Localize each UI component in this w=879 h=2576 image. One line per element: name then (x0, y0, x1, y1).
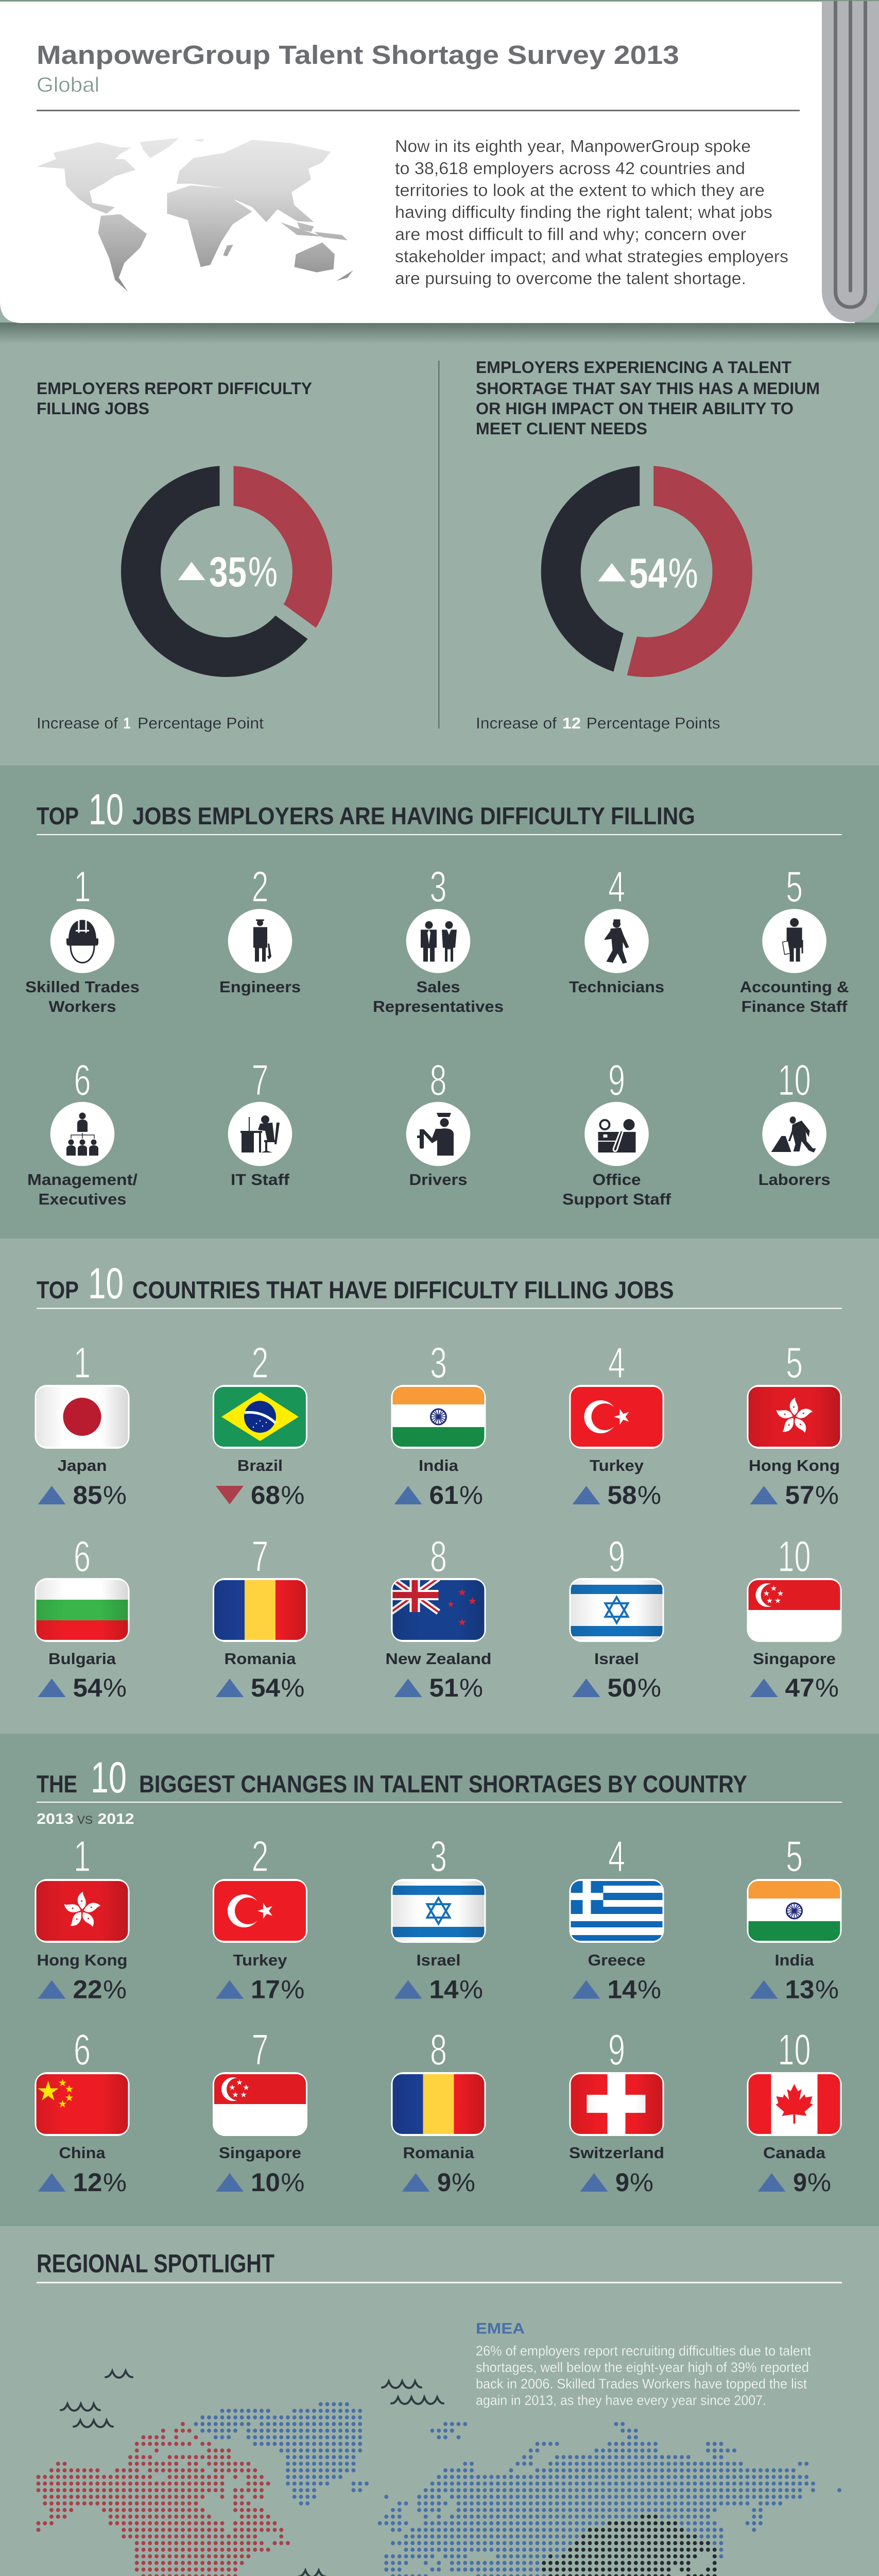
intro text block: are most difficult to fill and why; concern over (395, 225, 746, 244)
stat: 17% up (216, 1975, 305, 2004)
donut chart: 54% (561, 459, 732, 690)
job 1: skilled trades workers (25, 862, 140, 1015)
change 8: Romania: 8 (430, 2026, 447, 2074)
map region: Americas dots (38, 2424, 334, 2576)
country 4: Turkey: 4 (608, 1338, 625, 1387)
stat: 51% up: % (459, 1673, 483, 1702)
country 10: Singapore: Singapore (753, 1650, 836, 1668)
country 3: India: India (419, 1456, 459, 1475)
stat: 9% up: % (630, 2168, 653, 2197)
section band: top 10 jobs background (0, 766, 879, 1239)
change 10: Canada (747, 2026, 841, 2197)
flag: Japan (35, 1385, 130, 1449)
donut chart: 35% (141, 459, 322, 657)
flag: China (35, 2072, 130, 2136)
dotted world map (38, 2404, 839, 2576)
stat: 13% up: % (815, 1975, 839, 2004)
icon: hard hat (50, 909, 114, 973)
country 8: New Zealand: New Zealand (385, 1650, 491, 1668)
change 2: Turkey (213, 1832, 307, 2004)
job 10: laborers: 10 (778, 1056, 811, 1105)
stat: 50% up (573, 1673, 661, 1702)
stat: 9% up (580, 2168, 653, 2197)
change 7: Singapore: Singapore (219, 2144, 301, 2162)
heading: 10 (91, 1753, 127, 1802)
job 3: sales representatives: Representatives (373, 997, 504, 1015)
caption: increase of 12 percentage points: Increase of (476, 714, 557, 732)
job 10: laborers (759, 1056, 831, 1189)
change 6: China (35, 2026, 130, 2197)
heading: MEET CLIENT NEEDS (476, 419, 647, 438)
stat: 54% up (38, 1673, 127, 1702)
country 8: New Zealand (385, 1532, 491, 1702)
country 2: Brazil: 2 (251, 1338, 269, 1387)
stat: 14% up: % (637, 1975, 661, 2004)
intro text block (395, 137, 788, 287)
heading: BIGGEST CHANGES IN TALENT SHORTAGES BY COUNTRY (139, 1770, 747, 1798)
stat: 61% up (394, 1481, 483, 1510)
stat: 68% down: 68 (251, 1481, 280, 1510)
flag: Turkey (570, 1385, 664, 1449)
country 9: Israel: 9 (608, 1532, 625, 1581)
country 5: Hong Kong: 5 (786, 1338, 803, 1387)
heading (37, 1259, 674, 1308)
job 3: sales representatives: 3 (429, 862, 447, 911)
callout: EMEA: EMEA (476, 2320, 525, 2337)
country 1: Japan: Japan (58, 1456, 107, 1475)
job 6: management and executives: 6 (74, 1056, 91, 1105)
stat: 54% up: % (103, 1673, 127, 1702)
country 9: Israel (570, 1532, 664, 1702)
stat: 10% up: % (281, 2168, 305, 2197)
icon: office support (584, 1102, 649, 1166)
flag: Romania (391, 2072, 486, 2136)
stat: 14% up (573, 1975, 661, 2004)
job 1: skilled trades workers: Workers (48, 997, 116, 1015)
stat: 47% up: 47 (785, 1673, 815, 1702)
change 8: Romania (391, 2026, 486, 2197)
stat: 57% up (750, 1481, 839, 1510)
job 4: technicians (569, 862, 664, 996)
change 9: Switzerland (569, 2026, 664, 2197)
job 5: accounting and finance staff (740, 862, 849, 1015)
change 8: Romania: Romania (403, 2144, 474, 2162)
change 3: Israel: Israel (416, 1951, 460, 1969)
heading: TOP (37, 1276, 79, 1303)
country 5: Hong Kong: Hong Kong (749, 1456, 840, 1475)
change 9: Switzerland: 9 (608, 2026, 625, 2074)
subheading: 2013 vs 2012: 2013 (37, 1811, 74, 1827)
stat: 61% up: % (459, 1481, 483, 1510)
country 3: India (391, 1338, 486, 1510)
stat: 9% up: 9 (437, 2168, 451, 2197)
caption: increase of 1 percentage point: Percentage Point (137, 714, 264, 732)
stat: 57% up: % (815, 1481, 839, 1510)
country 4: Turkey (570, 1338, 664, 1510)
stat: 85% up: % (103, 1481, 127, 1510)
stat: 9% up: 9 (615, 2168, 629, 2197)
job 8: drivers: 8 (429, 1056, 447, 1105)
heading: EMPLOYERS EXPERIENCING A TALENT (476, 358, 791, 377)
stat: 54% up: 54 (251, 1673, 280, 1702)
change 7: Singapore (213, 2026, 307, 2197)
map region: Asia Pacific dots (544, 2517, 806, 2576)
job 7: IT staff: 7 (251, 1056, 269, 1105)
job 4: technicians: 4 (608, 862, 625, 911)
country 10: Singapore: 10 (778, 1532, 811, 1581)
heading: 10 (89, 785, 124, 834)
stat: 9% up (758, 2168, 831, 2197)
stat: 9% up: % (807, 2168, 831, 2197)
stat: 54% up: 54 (73, 1673, 102, 1702)
icon: accountant (762, 909, 826, 973)
change 5: India (747, 1832, 841, 2004)
panel: 10 biggest changes (35, 1753, 842, 2197)
title: ManpowerGroup Talent Shortage Survey 2013 (37, 40, 679, 70)
donut chart: 35%: 35 (209, 549, 247, 596)
stat: 10% up: 10 (251, 2168, 280, 2197)
job 1: skilled trades workers: Skilled Trades (25, 978, 140, 996)
icon: person at desk (228, 1102, 292, 1166)
change 4: Greece (570, 1832, 664, 2004)
stat: 58% up: % (637, 1481, 661, 1510)
donut chart: 54%: 54 (629, 550, 667, 597)
intro text block: territories to look at the extent to which they are (395, 180, 765, 200)
country 7: Romania: Romania (225, 1650, 296, 1668)
heading: 10 (88, 1259, 124, 1308)
job 5: accounting and finance staff: Finance Staff (742, 997, 848, 1015)
country 2: Brazil (213, 1338, 307, 1510)
donut chart: 35%: % (248, 549, 278, 596)
stat: 61% up: 61 (429, 1481, 458, 1510)
country 1: Japan: 1 (74, 1338, 91, 1387)
icon: engineer (228, 909, 292, 973)
job 10: laborers: Laborers (759, 1171, 831, 1189)
stat: 54% up (216, 1673, 305, 1702)
job 7: IT staff: IT Staff (231, 1171, 290, 1189)
subtitle: Global (37, 74, 99, 96)
panel: employers report difficulty (37, 379, 322, 732)
intro text block: stakeholder impact; and what strategies employers (395, 247, 788, 266)
job 4: technicians: Technicians (569, 978, 664, 996)
intro text block: to 38,618 employers across 42 countries and (395, 159, 745, 178)
job 9: office support staff: Office (592, 1171, 641, 1189)
panel: header notepad card (0, 0, 879, 344)
change 6: China: 6 (74, 2026, 91, 2074)
stat: 68% down: % (281, 1481, 305, 1510)
stat: 58% up (573, 1481, 661, 1510)
stat: 22% up (38, 1975, 127, 2004)
change 5: India: India (774, 1951, 814, 1969)
map region: EMEA dots (196, 2404, 839, 2576)
stat: 22% up: 22 (73, 1975, 102, 2004)
stat: 51% up (394, 1673, 483, 1702)
stat: 47% up (750, 1673, 839, 1702)
stat: 9% up: 9 (793, 2168, 807, 2197)
heading: COUNTRIES THAT HAVE DIFFICULTY FILLING JOBS (132, 1276, 674, 1303)
stat: 17% up: 17 (251, 1975, 280, 2004)
country 10: Singapore (747, 1532, 841, 1702)
icon: driver (406, 1102, 470, 1166)
subheading: 2013 vs 2012: 2012 (98, 1811, 134, 1827)
flag: Hong Kong (747, 1385, 841, 1449)
job 2: engineers (219, 862, 301, 996)
stat: 14% up: 14 (608, 1975, 637, 2004)
change 3: Israel: 3 (430, 1832, 447, 1880)
panel: regional spotlight (36, 2249, 842, 2576)
change 1: Hong Kong: 1 (74, 1832, 91, 1880)
job 2: engineers: 2 (251, 862, 269, 911)
heading: FILLING JOBS (37, 399, 149, 418)
flag: Israel (391, 1879, 486, 1943)
icon: org chart (50, 1102, 114, 1166)
caption: increase of 12 percentage points: Percentage Points (587, 714, 720, 732)
subheading: 2013 vs 2012: VS (77, 1814, 93, 1826)
heading: SHORTAGE THAT SAY THIS HAS A MEDIUM (476, 379, 820, 398)
flag: Hong Kong (35, 1879, 130, 1943)
intro text block: having difficulty finding the right talent; what jobs (395, 202, 772, 222)
icon: walking technician (584, 909, 649, 973)
intro text block: are pursuing to overcome the talent shortage. (395, 269, 746, 287)
stat: 14% up: % (459, 1975, 483, 2004)
job 3: sales representatives (373, 862, 504, 1015)
stat: 85% up: 85 (73, 1481, 102, 1510)
job 9: office support staff (562, 1056, 671, 1208)
change 4: Greece: 4 (608, 1832, 625, 1880)
job 9: office support staff: Support Staff (562, 1190, 671, 1208)
flag: Romania (213, 1578, 307, 1642)
stat: 68% down (216, 1481, 305, 1510)
change 7: Singapore: 7 (251, 2026, 269, 2074)
job 9: office support staff: 9 (608, 1056, 625, 1105)
icon: ocean waves (61, 2371, 777, 2576)
flag: Canada (747, 2072, 841, 2136)
callout: EMEA: back in 2006. Skilled Trades Workers have topped the list (476, 2376, 807, 2392)
change 9: Switzerland: Switzerland (569, 2144, 664, 2162)
job 7: IT staff (228, 1056, 292, 1189)
country 2: Brazil: Brazil (237, 1456, 283, 1475)
heading: REGIONAL SPOTLIGHT (37, 2249, 274, 2278)
flag: India (747, 1879, 841, 1943)
change 1: Hong Kong (35, 1832, 130, 2004)
job 6: management and executives (27, 1056, 137, 1208)
stat: 12% up (38, 2168, 127, 2197)
country 6: Bulgaria: 6 (74, 1532, 91, 1581)
job 2: engineers: Engineers (219, 978, 301, 996)
stat: 22% up: % (103, 1975, 127, 2004)
country 8: New Zealand: 8 (430, 1532, 447, 1581)
country 4: Turkey: Turkey (590, 1456, 644, 1475)
stat: 50% up: % (637, 1673, 661, 1702)
icon: laborer (762, 1102, 826, 1166)
icon: sales pair (406, 909, 470, 973)
job 5: accounting and finance staff: 5 (786, 862, 803, 911)
subheading: 2013 vs 2012 (37, 1811, 134, 1827)
flag: Switzerland (570, 2072, 664, 2136)
country 6: Bulgaria: Bulgaria (48, 1650, 116, 1668)
heading (37, 1753, 747, 1802)
job 5: accounting and finance staff: Accounting & (740, 978, 849, 996)
icon: notepad binding (822, 1, 879, 322)
stat: 51% up: 51 (429, 1673, 458, 1702)
country 1: Japan (35, 1338, 130, 1510)
flag: India (391, 1385, 486, 1449)
heading: TOP (37, 802, 79, 829)
caption: increase of 12 percentage points (476, 714, 720, 732)
icon: grey world map (37, 138, 353, 292)
country 9: Israel: Israel (594, 1650, 639, 1668)
caption: increase of 1 percentage point (37, 714, 264, 732)
heading: JOBS EMPLOYERS ARE HAVING DIFFICULTY FILLING (132, 802, 695, 829)
stat: 50% up: 50 (608, 1673, 636, 1702)
change 6: China: China (59, 2144, 106, 2162)
flag: Singapore (213, 2072, 307, 2136)
stat: 57% up: 57 (785, 1481, 815, 1510)
stat: 14% up (394, 1975, 483, 2004)
caption: increase of 12 percentage points: 12 (562, 714, 581, 732)
stat: 17% up: % (281, 1975, 305, 2004)
change 2: Turkey: Turkey (233, 1951, 287, 1969)
heading: EMPLOYERS REPORT DIFFICULTY (37, 379, 312, 398)
heading (37, 785, 695, 834)
callout: EMEA: shortages, well below the eight-year high of 39% reported (476, 2360, 809, 2375)
job 6: management and executives: Management/ (27, 1171, 137, 1189)
callout: EMEA (476, 2320, 811, 2408)
country 5: Hong Kong (747, 1338, 841, 1510)
flag: Greece (570, 1879, 664, 1943)
change 10: Canada: 10 (778, 2026, 811, 2074)
country 6: Bulgaria (35, 1532, 130, 1702)
flag: Brazil (213, 1385, 307, 1449)
change 4: Greece: Greece (588, 1951, 646, 1969)
caption: increase of 1 percentage point: Increase of (37, 714, 118, 732)
heading: OR HIGH IMPACT ON THEIR ABILITY TO (476, 399, 794, 418)
flag: Israel (570, 1578, 664, 1642)
job 6: management and executives: Executives (38, 1190, 127, 1208)
heading: THE (37, 1770, 77, 1798)
stat: 58% up: 58 (608, 1481, 636, 1510)
caption: increase of 1 percentage point: 1 (124, 714, 131, 732)
flag: Turkey (213, 1879, 307, 1943)
stat: 12% up: 12 (73, 2168, 102, 2197)
change 3: Israel (391, 1832, 486, 2004)
panel: top 10 countries (35, 1259, 842, 1702)
heading (476, 358, 820, 438)
country 7: Romania: 7 (251, 1532, 269, 1581)
stat: 14% up: 14 (429, 1975, 459, 2004)
job 3: sales representatives: Sales (416, 978, 460, 996)
heading (37, 379, 312, 418)
stat: 54% up: % (281, 1673, 305, 1702)
stat: 12% up: % (103, 2168, 127, 2197)
change 2: Turkey: 2 (251, 1832, 269, 1880)
panel: top 10 jobs (25, 785, 849, 1208)
change 10: Canada: Canada (763, 2144, 826, 2162)
job 1: skilled trades workers: 1 (74, 862, 91, 911)
stat: 10% up (216, 2168, 305, 2197)
flag: New Zealand (391, 1578, 486, 1642)
job 8: drivers: Drivers (409, 1171, 468, 1189)
flag: Singapore (747, 1578, 841, 1642)
stat: 85% up (38, 1481, 127, 1510)
stat: 13% up (750, 1975, 839, 2004)
intro text block: Now in its eighth year, ManpowerGroup spoke (395, 137, 751, 156)
stat: 9% up: % (452, 2168, 475, 2197)
job 8: drivers (406, 1056, 470, 1189)
country 7: Romania (213, 1532, 307, 1702)
panel: medium or high impact (476, 358, 820, 732)
change 5: India: 5 (786, 1832, 803, 1880)
callout: EMEA: again in 2013, as they have every year since 2007. (476, 2393, 766, 2408)
section band: biggest changes background (0, 1734, 879, 2226)
country 3: India: 3 (430, 1338, 447, 1387)
callout: EMEA: 26% of employers report recruiting difficulties due to talent (476, 2343, 811, 2359)
flag: Bulgaria (35, 1578, 130, 1642)
stat: 47% up: % (815, 1673, 839, 1702)
stat: 9% up (402, 2168, 475, 2197)
donut chart: 54%: % (668, 550, 698, 597)
change 1: Hong Kong: Hong Kong (37, 1951, 128, 1969)
stat: 13% up: 13 (785, 1975, 815, 2004)
